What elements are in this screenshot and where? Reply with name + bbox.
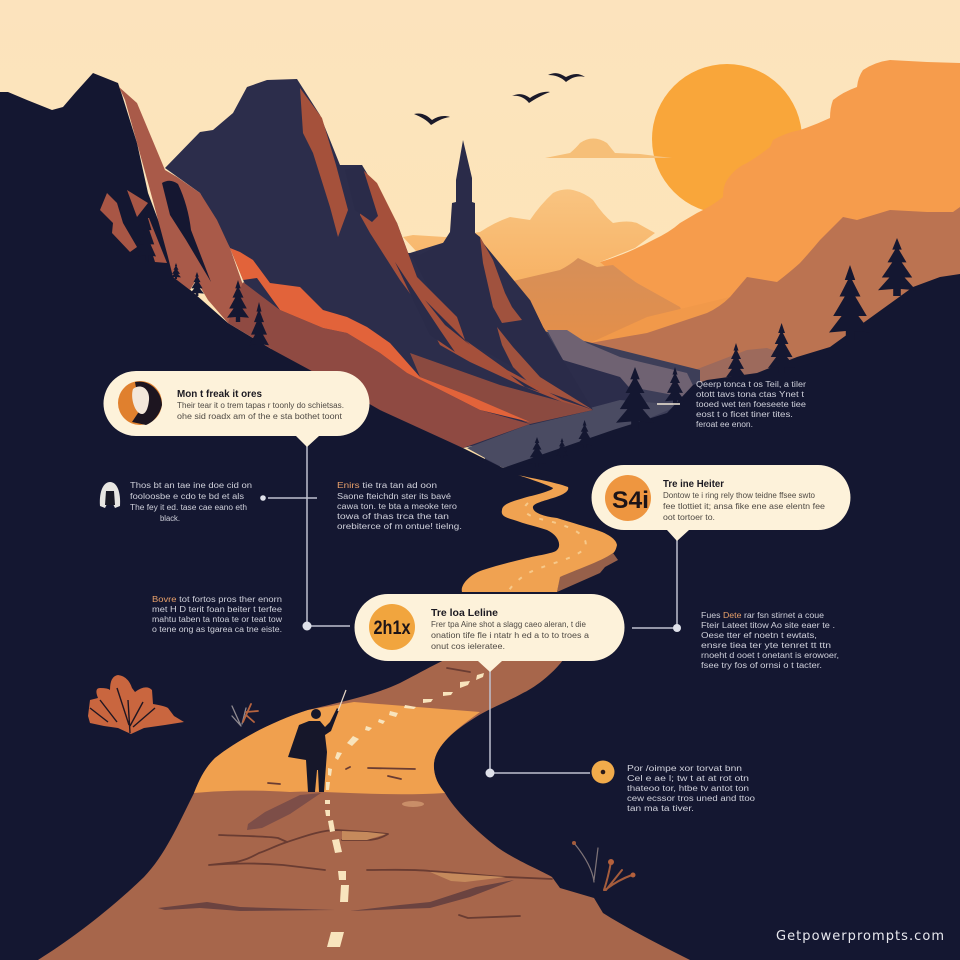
callout body: centre: Frer tpa Aine shot a slagg caeo aleran, t die [431, 620, 587, 629]
callout: right: fee tlottiet it; ansa fike ene ase elentn fee [663, 502, 826, 511]
callout avatar: portrait [118, 381, 162, 425]
text block: centre: towa of thas trca the tan [337, 512, 449, 521]
text block: centre: cawa ton. te bta a meoke tero [337, 502, 458, 511]
central mountain: lit rock face [360, 170, 593, 410]
main road [38, 650, 690, 960]
text block: upper right: Qeerp tonca t os Teil, a tiler [696, 380, 806, 389]
sun [652, 64, 802, 214]
text block: right [701, 611, 839, 670]
bottom right plant [572, 841, 636, 890]
central mountain [165, 79, 593, 425]
icon: hooded figure [100, 482, 120, 508]
callout body: Their tear it o trem tapas r toonly do schietsas. [177, 401, 344, 410]
connector lines [268, 404, 680, 773]
text block: upper right: feroat ee enon. [696, 420, 753, 429]
distant hump [687, 348, 800, 400]
text block: lower right [627, 764, 756, 813]
callout heading: centre: Tre loa Leline [431, 607, 498, 619]
small plant [232, 704, 258, 726]
orange bush [88, 675, 184, 734]
main road: spot [402, 801, 424, 807]
callout heading: Mon t freak it ores [177, 388, 262, 400]
callout badge: right [605, 475, 651, 521]
text block: lower right: Cel e ae l; tw t at at rot otn [627, 774, 749, 783]
main road: centre dashes [325, 673, 484, 947]
callout: centre: onation tife fle i ntatr h ed a to to troes a [431, 631, 590, 640]
bush: dark veins [90, 688, 155, 733]
right brown band [410, 353, 593, 424]
callout: top left [104, 371, 370, 447]
callout body: right: Dontow te i ring rely thow teidne ffsee swto [663, 491, 816, 500]
text block: lower left: o tene ong as tgarea ca tne eiste. [152, 625, 282, 634]
upper road: faded dashes [508, 503, 586, 592]
main road: figure shadow [247, 793, 321, 830]
text block: lower right: cew ecssor tros uned and ttoo [627, 794, 756, 803]
callout: centre: onut cos ieleratee. [431, 642, 505, 651]
valley underlay [480, 330, 700, 470]
hiker silhouette [288, 690, 346, 792]
tower mountain: rock face [480, 237, 593, 410]
pine trees [138, 207, 916, 467]
sky background [0, 0, 960, 480]
orange rock streak [230, 248, 530, 422]
connector dots [260, 495, 681, 778]
tower mountain [410, 140, 593, 410]
text block: right: Oese tter ef noetn t ewtats, [701, 631, 817, 640]
text block: upper right [696, 380, 807, 429]
text block: right: Fteir Lateet titow Ao site eaer te . [701, 621, 835, 630]
rock face cavity [162, 181, 211, 282]
main road: sunlit band [194, 702, 480, 794]
glowing valley strip [590, 297, 730, 345]
text block: lower right: tan ma ta tiver. [627, 804, 694, 813]
lit rock face: dark clefts [345, 165, 540, 392]
mountain massif base [230, 233, 640, 448]
text block: lower left: met H D terit foan beiter t terfee [152, 605, 283, 614]
text block: upper right: otott tavs tona ctas Ynet t [696, 390, 805, 399]
main road: cracks [209, 668, 552, 918]
text block: lower left: mahtu taben ta ntoa te or teat tow [152, 615, 282, 624]
callout: right [592, 465, 850, 541]
icon: coin marker [592, 760, 614, 784]
callout: centre [354, 594, 624, 672]
text block: upper right: eost t o ficet tiner tites. [696, 410, 793, 419]
text block: centre: Enirs tie tra tan ad oon [337, 481, 437, 490]
text block: left: The fey it ed. tase cae eano eth [130, 503, 247, 512]
right orange slope [590, 207, 960, 400]
text block: left: black. [160, 514, 180, 523]
text block: lower right: thateoo tor, htbe tv antot ton [627, 784, 749, 793]
main road: wide cracks [158, 880, 514, 911]
text block: left: Thos bt an tae ine doe cid on [130, 481, 252, 490]
text block: centre: Saone fteichdn ster its bavé [337, 492, 452, 501]
small cloud [545, 138, 672, 158]
callout badge: right: S4i [612, 487, 649, 514]
callout: right: oot tortoer to. [663, 513, 715, 522]
large orange clouds [597, 60, 960, 330]
text block: right: Fues Dete rar fsn stirnet a coue [701, 611, 825, 620]
watermark: Getpowerprompts.com [776, 929, 944, 944]
text block: centre [337, 481, 462, 531]
callout badge: centre [369, 604, 415, 650]
birds [414, 73, 585, 125]
text block: right: rnoeht d ooet t onetant is erowoer, [701, 651, 839, 660]
text block: right: ensre tiea ter yte tenret tt ttn [701, 641, 831, 650]
hiker: raised stick [338, 690, 346, 711]
lower red slope [228, 282, 530, 448]
text block: centre: orebiterce of m ontue! tielng. [337, 522, 462, 531]
upper road: sunlit surface [462, 475, 617, 592]
text block: lower left [152, 595, 283, 634]
winding upper road [462, 475, 618, 592]
text block: lower right: Por /oimpe xor torvat bnn [627, 764, 742, 773]
mid orange hill [505, 258, 700, 350]
lower valley floor [467, 400, 680, 468]
text block: left: fooloosbe e cdo te bd et als [130, 492, 244, 501]
left mountain rock face [119, 87, 243, 323]
distant purple valley [547, 330, 700, 400]
main road: pothole patches [342, 831, 506, 882]
text block: upper right: tooed wet ten foeseete tiee [696, 400, 807, 409]
left small rocks [100, 190, 167, 263]
callout badge: centre: 2h1x [374, 618, 411, 639]
callout heading: right: Tre ine Heiter [663, 478, 724, 490]
far pale hills [403, 189, 680, 330]
text block: left [130, 481, 252, 523]
text block: right: fsee try fos of ornsi o t tacter. [701, 661, 822, 670]
callout: top left: ohe sid roadx am of the e sta bothet toont [177, 412, 343, 421]
central peak rock strip [300, 88, 348, 237]
text block: lower left: Bovre tot fortos pros ther enorn [152, 595, 282, 604]
